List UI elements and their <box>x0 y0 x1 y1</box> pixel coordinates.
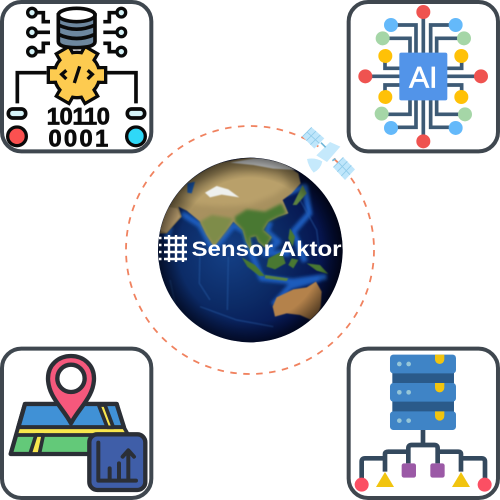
chip label: AI <box>409 61 437 94</box>
islands: philippines <box>288 228 295 247</box>
nodes <box>358 5 488 148</box>
icon: circuit lines <box>17 13 136 103</box>
logo: hash icon <box>159 235 187 262</box>
server rack <box>390 355 456 430</box>
icon: satellite <box>302 127 355 180</box>
panel: map analytics <box>2 349 151 498</box>
snow: north <box>230 157 296 170</box>
land: india <box>200 215 233 246</box>
chip <box>399 53 447 100</box>
network lines <box>362 430 485 478</box>
binary text: 10110 <box>47 104 110 131</box>
islands: papua <box>307 263 328 274</box>
ocean ridges <box>170 200 320 327</box>
islands: java <box>265 275 288 281</box>
pin <box>48 356 94 423</box>
ocean shelves <box>167 187 327 305</box>
binary text: 0001 <box>48 125 108 152</box>
land: central asia tan <box>173 170 290 207</box>
panel: data processing <box>2 2 151 152</box>
snow: himalaya <box>205 186 239 197</box>
circuit traces <box>370 17 480 137</box>
icon: blue dot <box>127 127 145 146</box>
islands: borneo <box>267 252 286 269</box>
land: arabia <box>158 207 180 233</box>
land: asia <box>157 157 301 255</box>
land: japan <box>293 185 307 205</box>
icon: left pill <box>8 109 26 118</box>
water: caspian <box>187 182 195 193</box>
icon: red dot <box>8 127 26 146</box>
orbit: dashed circle <box>126 126 374 374</box>
islands: sumatra <box>242 257 265 276</box>
chart card <box>89 434 145 490</box>
nodes <box>355 463 492 492</box>
icon: right pill <box>127 109 145 118</box>
panel: AI chip <box>349 2 498 151</box>
panel: server network <box>349 349 498 498</box>
icon: database <box>58 8 95 48</box>
land: green southeast <box>235 203 287 254</box>
logo text: Sensor Aktor <box>192 237 342 261</box>
land: australia <box>273 282 322 322</box>
islands: sulawesi <box>288 258 298 268</box>
map <box>11 404 129 454</box>
icon: gear <box>48 47 106 103</box>
globe <box>157 157 343 342</box>
icon: circuit nodes <box>28 8 126 56</box>
